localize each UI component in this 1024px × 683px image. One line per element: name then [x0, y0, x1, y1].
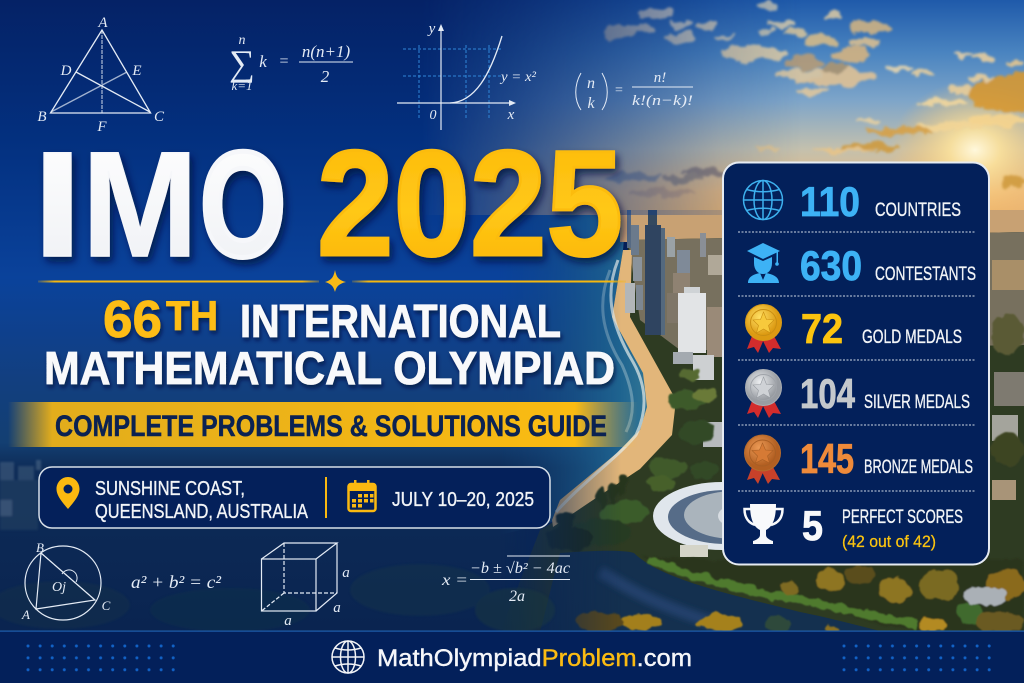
title: IMO 2025: 2025	[317, 119, 623, 287]
math: graph of y = x squared	[397, 21, 537, 130]
math: quadratic formula: −b ± √b² − 4ac	[470, 560, 570, 577]
surf	[556, 260, 644, 512]
math: summation formula: n	[238, 33, 246, 48]
background: navy overlay on sky	[0, 0, 783, 215]
math: quadratic formula	[441, 556, 570, 605]
icon: trophy	[744, 504, 782, 544]
math: circle diagram: B	[36, 540, 44, 555]
lakeside lawn and trees	[576, 556, 1024, 633]
stat: 5 perfect scores: 5	[802, 502, 823, 549]
footer dots left	[22, 640, 179, 676]
math: graph of y = x squared: y = x²	[499, 70, 537, 85]
stat: 72 gold medals: GOLD MEDALS	[862, 326, 962, 348]
background: left shore buildings and trees	[0, 460, 555, 632]
subtitle: 66th International Mathematical Olympiad	[44, 291, 615, 394]
location text	[95, 478, 309, 523]
icon: gold medal	[746, 304, 782, 353]
math: summation formula: =	[279, 53, 289, 70]
stat: 72 gold medals	[746, 304, 962, 353]
title: IMO 2025: I	[32, 120, 83, 288]
background: ocean	[0, 215, 667, 560]
stat: 630 contestants: CONTESTANTS	[875, 263, 976, 285]
banner: complete problems and solutions guide	[8, 402, 638, 447]
math: binomial formula	[576, 70, 693, 112]
math: circle diagram: A	[21, 607, 30, 622]
math: binomial formula: n	[587, 75, 595, 92]
icon: location pin	[56, 477, 80, 509]
title: IMO 2025: O	[200, 120, 286, 288]
title: IMO 2025: M	[82, 120, 198, 288]
icon: silver medal	[746, 370, 782, 418]
math: summation formula: ∑	[229, 43, 255, 83]
math: graph of y = x squared: y	[427, 21, 436, 37]
icon: calendar	[348, 480, 376, 511]
math: graph of y = x squared: 0	[430, 108, 436, 123]
math: binomial formula: =	[615, 83, 623, 98]
math: binomial formula: n!	[654, 70, 666, 86]
math: quadratic formula: x =	[441, 572, 468, 589]
math: summation formula	[229, 33, 353, 93]
icon: bronze medal	[744, 435, 780, 484]
stat: 72 gold medals: 72	[801, 305, 843, 352]
buildings	[625, 210, 1024, 500]
math: cube diagram: a	[284, 613, 292, 629]
icon: graduate	[747, 243, 780, 283]
math: cube diagram	[262, 543, 350, 629]
panel: statistics	[723, 162, 989, 564]
icon: globe	[744, 180, 782, 220]
stat: 110 countries: COUNTRIES	[875, 199, 961, 221]
stadium	[653, 482, 791, 557]
math: summation formula: k=1	[231, 78, 253, 93]
math: quadratic formula: 2a	[509, 588, 525, 605]
stat: 110 countries: 110	[800, 178, 860, 225]
math: pythagorean formula: a² + b² = c²	[131, 572, 222, 592]
subtitle: 66th International Mathematical Olympiad: MATHEMATICAL OLYMPIAD	[44, 342, 615, 394]
subtitle: 66th International Mathematical Olympiad: INTERNATIONAL	[240, 295, 561, 347]
math: circle diagram: Oj	[52, 580, 66, 595]
math: triangle diagram: A	[97, 15, 108, 31]
math: summation formula: 2	[321, 67, 330, 86]
website: MathOlympiad Problem.com	[377, 645, 692, 672]
math: binomial formula: k!(n−k)!	[632, 93, 693, 109]
math: triangle diagram: D	[60, 63, 72, 79]
stat: 104 silver medals: 104	[800, 370, 856, 417]
math: circle diagram	[21, 540, 111, 622]
lake	[540, 551, 880, 631]
background: sunset sky	[0, 0, 1024, 240]
stat: 104 silver medals: SILVER MEDALS	[864, 391, 970, 413]
math: triangle diagram	[37, 15, 165, 135]
stat: 5 perfect scores	[744, 502, 963, 551]
stat: 145 bronze medals: 145	[800, 435, 854, 482]
stat: 145 bronze medals	[744, 435, 973, 484]
location text: QUEENSLAND, AUSTRALIA	[95, 501, 309, 523]
math: triangle diagram: E	[131, 63, 142, 79]
math: triangle diagram: C	[154, 109, 165, 125]
math: graph of y = x squared: x	[507, 107, 515, 123]
stat: 630 contestants: 630	[800, 242, 862, 289]
stat: 104 silver medals	[746, 370, 970, 418]
subtitle: 66th International Mathematical Olympiad: TH	[166, 292, 218, 339]
math: circle diagram: C	[102, 598, 111, 613]
subtitle: 66th International Mathematical Olympiad: 66	[103, 291, 162, 349]
math: triangle diagram: B	[37, 109, 47, 125]
banner: complete problems and solutions guide: COMPLETE PROBLEMS & SOLUTIONS GUIDE	[55, 410, 607, 443]
trees near city and beach	[546, 315, 1024, 551]
stat: 110 countries	[744, 178, 961, 225]
date text: JULY 10–20, 2025	[392, 489, 534, 511]
title: IMO 2025	[32, 119, 623, 288]
beach	[552, 250, 676, 527]
stat: 5 perfect scores: PERFECT SCORES	[842, 506, 963, 528]
background: coastal land and city	[500, 210, 1024, 633]
math: summation formula: k	[259, 52, 267, 71]
footer dots right	[838, 640, 995, 676]
location text: SUNSHINE COAST,	[95, 478, 245, 500]
stat: 5 perfect scores: (42 out of 42)	[842, 532, 936, 551]
math: binomial formula: k	[587, 95, 595, 112]
background: navy overlay on lower left	[0, 215, 617, 630]
icon: footer globe	[332, 641, 364, 673]
math: cube diagram: a	[333, 600, 341, 616]
stat: 630 contestants	[747, 242, 976, 289]
math: summation formula: n(n+1)	[302, 42, 350, 61]
footer bar	[0, 630, 1024, 683]
math: triangle diagram: F	[96, 119, 107, 135]
divider with star	[38, 270, 626, 292]
math: cube diagram: a	[342, 565, 350, 581]
location and date box	[39, 467, 550, 528]
